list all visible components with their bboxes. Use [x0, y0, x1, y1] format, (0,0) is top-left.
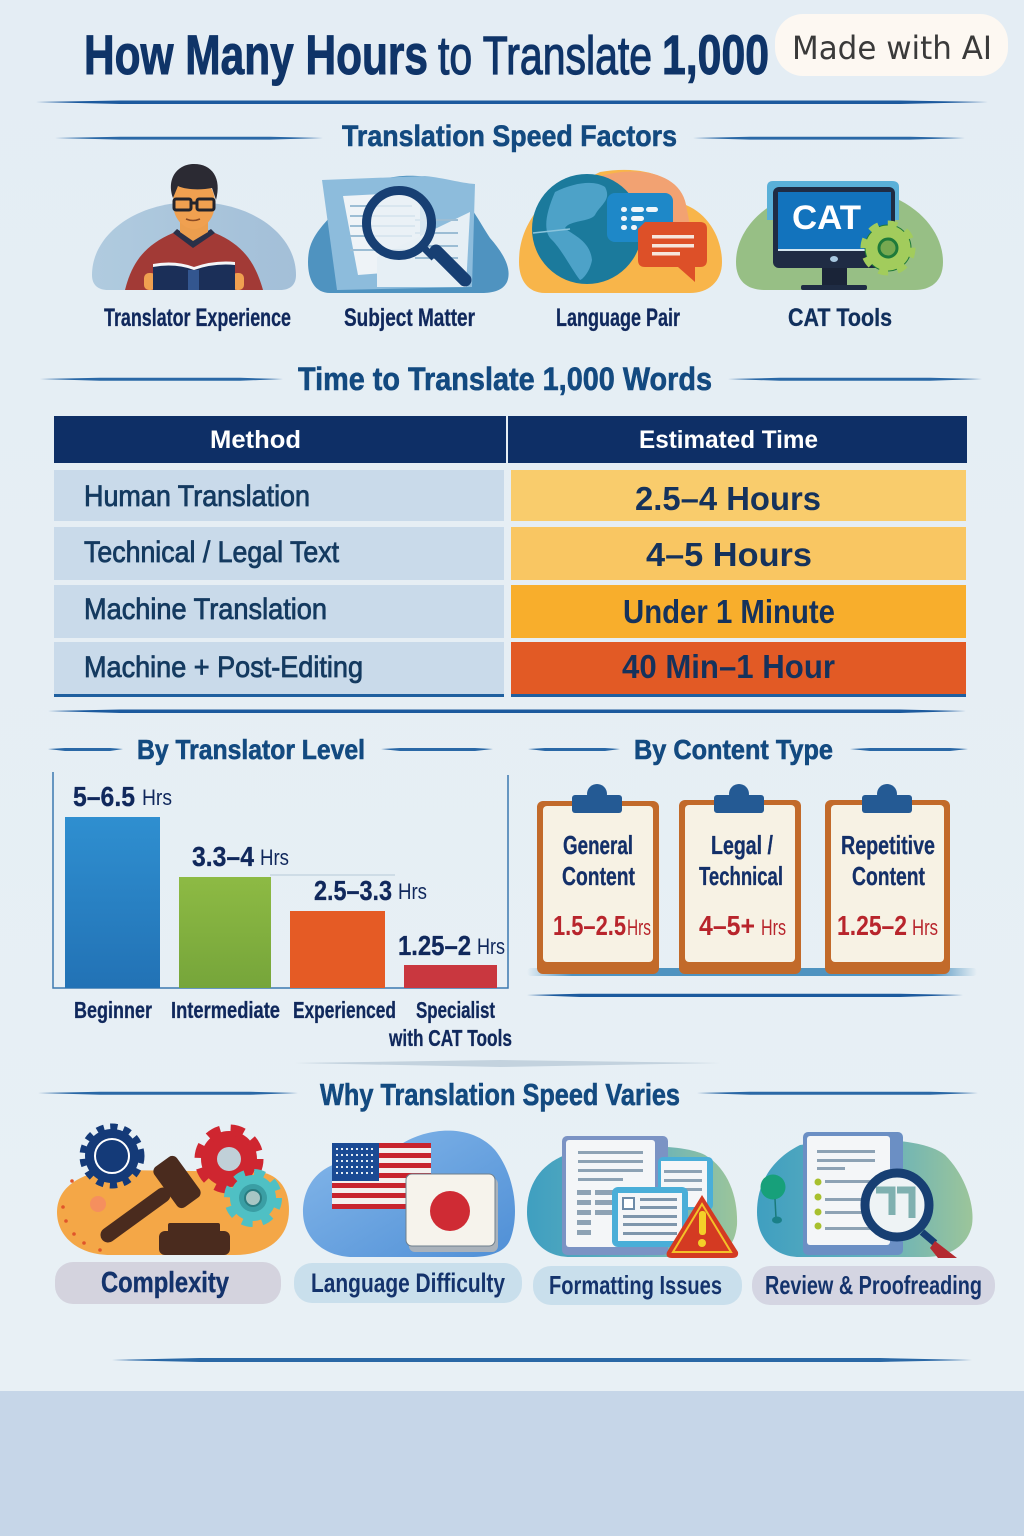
- label pill: language difficulty: Language Difficulty: [311, 1268, 505, 1298]
- bar: experienced: Experienced: [293, 997, 396, 1023]
- title divider: [36, 100, 988, 104]
- row: human translation: [54, 470, 966, 521]
- clipboard: legal technical: 4–5+: [699, 910, 755, 941]
- heading: why translation speed varies: [38, 1077, 978, 1112]
- label pill: formatting issues: Formatting Issues: [549, 1270, 722, 1300]
- label: translator experience: Translator Experience: [104, 304, 291, 332]
- row: technical legal text: 4–5 Hours: [646, 536, 812, 573]
- icon: translator experience: [92, 164, 296, 290]
- bar: experienced: [290, 875, 427, 1023]
- table header: Estimated Time: [639, 426, 818, 454]
- heading: time to translate: Time to Translate 1,000 Words: [298, 361, 712, 397]
- badge: made with ai: [775, 14, 1008, 76]
- clipboards: by content type: [527, 784, 977, 976]
- icon: subject matter: [308, 176, 509, 293]
- label pill: complexity: [55, 1262, 281, 1304]
- magnifier: [865, 1173, 957, 1258]
- bar: experienced: Hrs: [398, 879, 427, 904]
- bar: intermediate: 3.3–4: [192, 841, 254, 872]
- icon: cat tools: [736, 181, 943, 290]
- clipboard: repetitive content: 1.25–2: [837, 910, 907, 941]
- label: language pair: Language Pair: [556, 304, 680, 332]
- heading: by translator level: [48, 734, 493, 765]
- title: 1,000: [662, 23, 769, 86]
- clipboard: legal technical: [679, 784, 801, 974]
- flag: usa: [332, 1143, 431, 1209]
- icon: complexity: [57, 1128, 289, 1255]
- bar: specialist: Specialist: [416, 997, 495, 1023]
- heading: by translator level: By Translator Level: [137, 734, 365, 765]
- clipboard: general content: [537, 784, 659, 974]
- title: How Many Hours: [84, 23, 428, 86]
- title: Words?: [785, 23, 975, 86]
- label: subject matter: Subject Matter: [344, 304, 475, 332]
- row: machine post-editing: Machine + Post-Editing: [84, 651, 363, 684]
- icon: formatting issues: [527, 1136, 738, 1258]
- clipboard: repetitive content: Content: [852, 861, 925, 891]
- table header: Method: [210, 426, 301, 454]
- bar: beginner: Beginner: [74, 997, 152, 1023]
- heading: why translation speed varies: Why Translation Speed Varies: [320, 1077, 680, 1112]
- row: machine post-editing: 40 Min–1 Hour: [622, 648, 835, 685]
- icon: language difficulty: [303, 1131, 515, 1257]
- title: to Translate: [438, 26, 652, 86]
- bar: specialist: [388, 930, 512, 1051]
- label pill: review and proofreading: [752, 1266, 995, 1305]
- gear: teal: [229, 1174, 277, 1222]
- clipboard: repetitive content: Repetitive: [841, 830, 935, 860]
- bar: specialist: 1.25–2: [398, 930, 471, 961]
- badge: made with ai: Made with AI: [792, 29, 992, 67]
- warning triangle: [667, 1195, 738, 1258]
- clipboard: general content: General: [563, 830, 633, 860]
- clipboard: general content: Hrs: [627, 915, 651, 940]
- clipboard: repetitive content: Hrs: [912, 915, 938, 940]
- bottom band: [0, 1391, 1024, 1536]
- table: time by method: [54, 416, 967, 697]
- row: machine translation: [54, 585, 966, 638]
- clipboard: general content: Content: [562, 861, 635, 891]
- clipboard: legal technical: Technical: [699, 861, 783, 891]
- label pill: formatting issues: [533, 1266, 742, 1305]
- clipboard: repetitive content: [825, 784, 950, 974]
- bar chart: by translator level: [53, 772, 512, 1051]
- table header: [54, 416, 967, 463]
- bar: intermediate: [171, 841, 289, 1023]
- clipboard: legal technical: Legal /: [711, 830, 773, 860]
- bar: beginner: [65, 781, 172, 1023]
- row: technical legal text: [54, 527, 966, 580]
- bar: specialist: with CAT Tools: [388, 1025, 512, 1051]
- row: technical legal text: Technical / Legal Text: [84, 536, 340, 569]
- icon: language pair: [519, 170, 722, 293]
- icon: cat tools: CAT: [792, 199, 861, 237]
- clipboard: general content: 1.5–2.5: [553, 910, 626, 941]
- row: human translation: Human Translation: [84, 480, 310, 513]
- clipboard: legal technical: Hrs: [761, 915, 786, 940]
- bar: intermediate: Hrs: [260, 845, 289, 870]
- row: machine translation: Machine Translation: [84, 593, 327, 626]
- bar: experienced: 2.5–3.3: [314, 875, 392, 906]
- heading: by content type: By Content Type: [634, 734, 833, 765]
- icon: review and proofreading: [757, 1132, 973, 1258]
- label: cat tools: CAT Tools: [788, 304, 892, 332]
- row: human translation: 2.5–4 Hours: [635, 480, 821, 517]
- heading: time to translate: [40, 361, 982, 397]
- row: machine post-editing: [54, 642, 966, 697]
- gavel: [108, 1154, 230, 1255]
- flag: japan: [406, 1174, 498, 1252]
- label pill: complexity: Complexity: [101, 1267, 229, 1299]
- label pill: language difficulty: [294, 1263, 522, 1303]
- heading: by content type: [528, 734, 968, 765]
- bar: intermediate: Intermediate: [171, 997, 280, 1023]
- bar: specialist: Hrs: [477, 934, 505, 959]
- row: machine translation: Under 1 Minute: [623, 593, 835, 630]
- title: [84, 23, 975, 86]
- bar: beginner: 5–6.5: [73, 781, 135, 812]
- bar: beginner: Hrs: [142, 785, 172, 810]
- gear: red: [200, 1130, 258, 1188]
- gear: navy: [84, 1128, 140, 1184]
- heading: translation speed factors: Translation Speed Factors: [342, 120, 677, 153]
